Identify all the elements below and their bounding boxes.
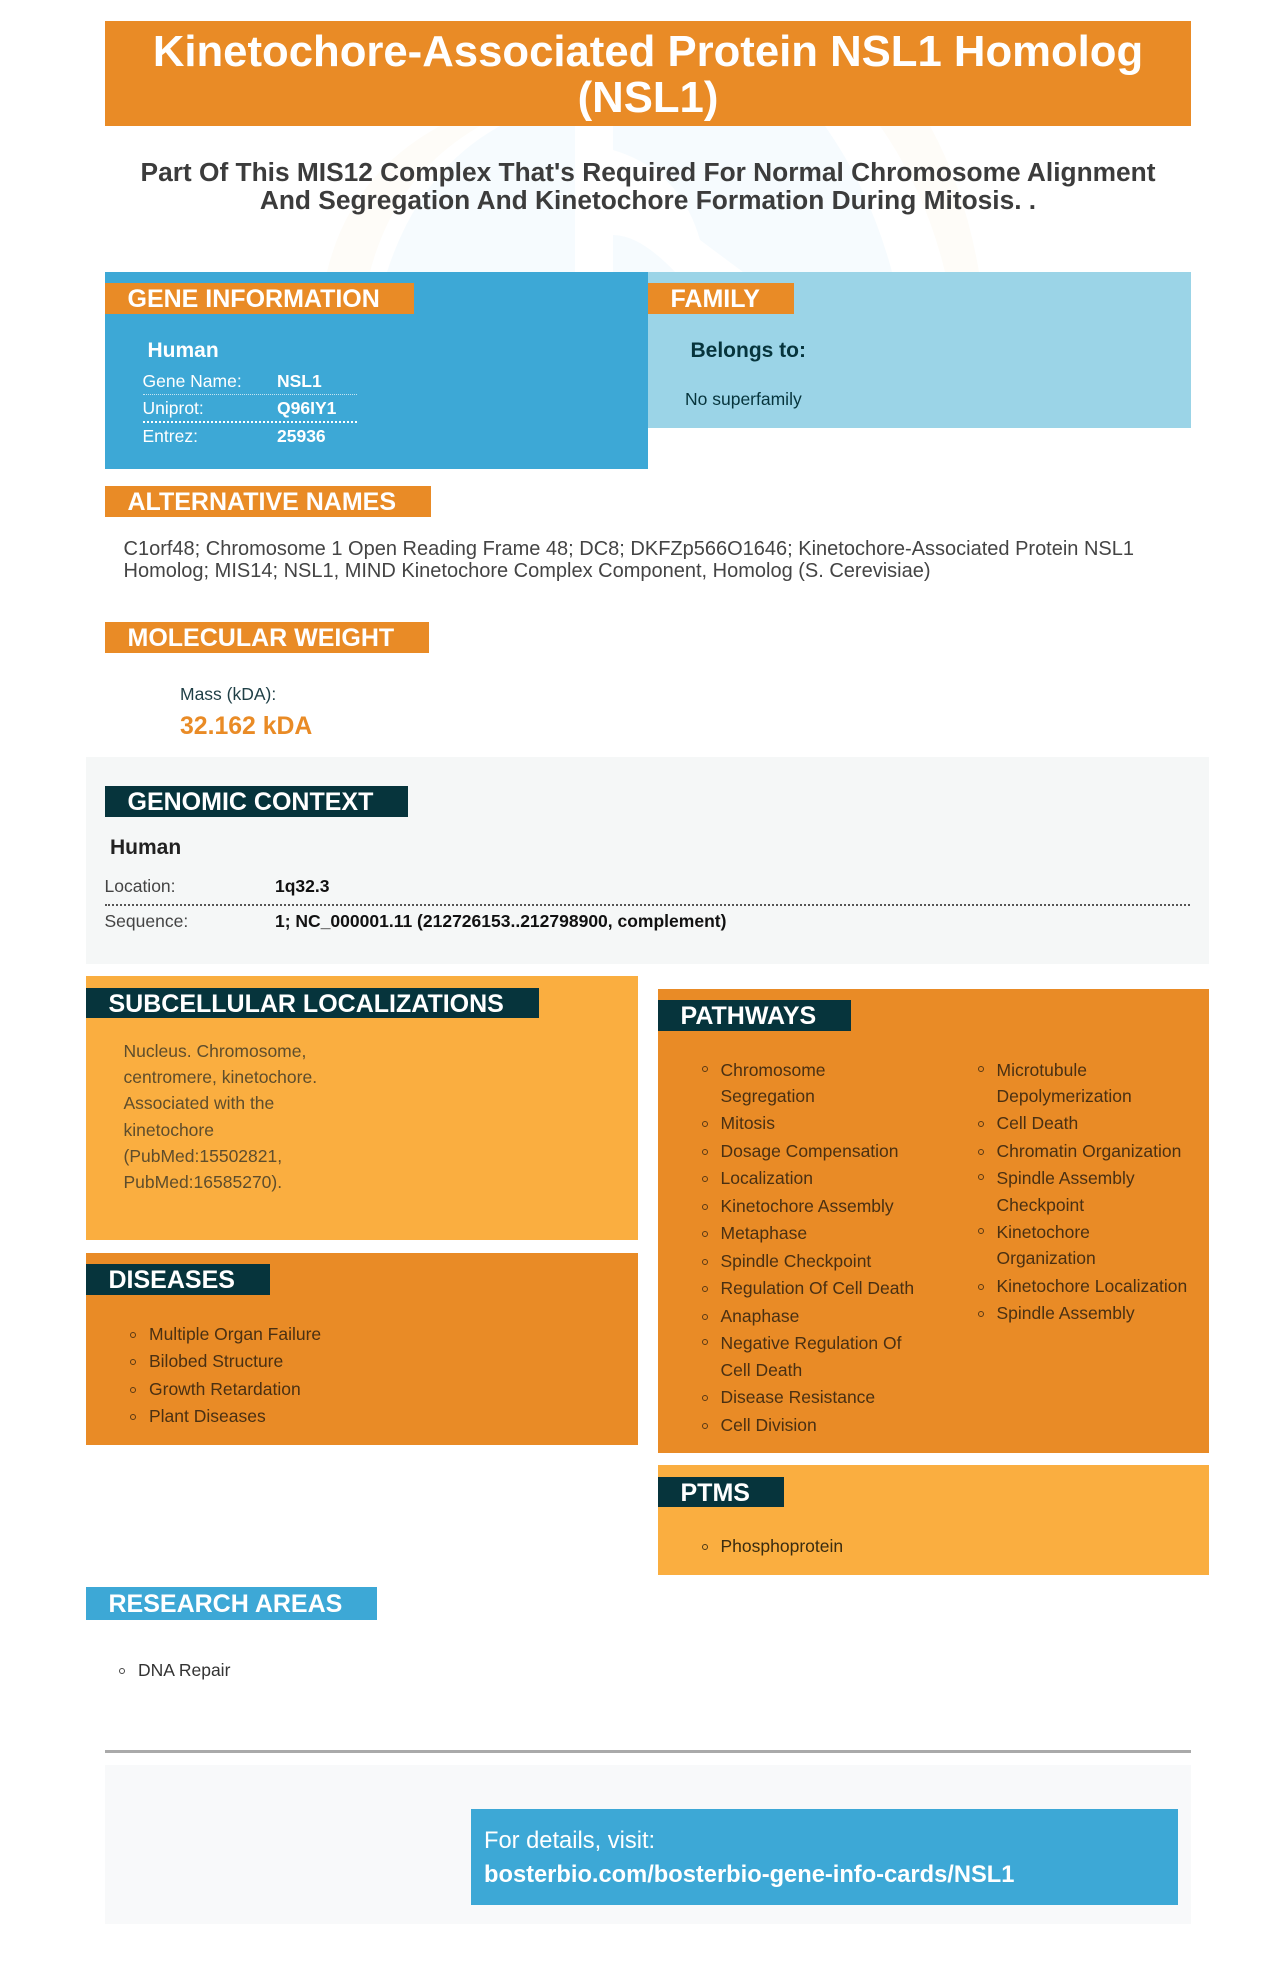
superfamily value: No superfamily [685,389,802,409]
pathway item: Localization [720,1168,813,1188]
pathway item: Spindle Checkpoint [720,1251,871,1271]
pathway item: Organization [996,1248,1096,1268]
value: entrez: 25936 [277,426,326,446]
pathway item: Segregation [720,1086,815,1106]
pathway item: Microtubule [996,1060,1087,1080]
species: human: Human [110,836,181,858]
heading: alternative names: ALTERNATIVE NAMES [128,488,396,516]
heading: ptms [658,1477,784,1507]
localization text: centromere, kinetochore. [124,1067,317,1087]
pathway item: Chromatin Organization [996,1141,1181,1161]
pathway item: Chromosome [720,1060,826,1080]
label: uniprot: Uniprot: [142,398,204,418]
subtitle: And Segregation And Kinetochore Formation During Mitosis. . [260,185,1036,215]
ptm item: Phosphoprotein [720,1536,843,1556]
pathway item: Negative Regulation Of [720,1332,901,1352]
belongs to label: Belongs to: [690,338,806,362]
subtitle: Part Of This MIS12 Complex That's Required For Normal Chromosome Alignment [141,157,1155,187]
value: sequence: 1; NC_000001.11 (212726153..212798900, complement) [275,911,726,931]
heading: gene information: GENE INFORMATION [128,285,380,313]
panel: gene information [105,272,648,469]
heading: genomic context: GENOMIC CONTEXT [128,788,373,816]
disease item: Bilobed Structure [149,1351,283,1371]
disease item: Growth Retardation [149,1379,301,1399]
value: location: 1q32.3 [275,876,329,896]
pathway item: Checkpoint [996,1195,1084,1215]
pathway item: Dosage Compensation [720,1141,899,1161]
pathway item: Metaphase [720,1223,807,1243]
pathway item [996,1219,1096,1271]
pathway item [996,1165,1135,1219]
visit url: bosterbio.com/bosterbio-gene-info-cards/NSL1 [484,1862,1014,1888]
visit label: For details, visit: [484,1828,655,1854]
callout: details link [471,1809,1178,1905]
localization text: Associated with the [124,1093,274,1113]
alternative names text [124,538,1134,582]
pathway item: Cell Death [996,1112,1078,1132]
heading: molecular weight: MOLECULAR WEIGHT [128,624,394,652]
localization text: Nucleus. Chromosome, [124,1041,306,1061]
panel: footer [105,1765,1191,1924]
pathway item: Disease Resistance [720,1387,875,1407]
heading: diseases [86,1264,270,1295]
pathway item: Cell Death [720,1360,802,1380]
title [105,21,1191,126]
label: sequence: Sequence: [104,911,188,931]
panel: ptms [658,1465,1209,1575]
pathway item: Anaphase [720,1306,799,1326]
pathway item: Spindle Assembly [996,1303,1135,1323]
localization text [124,1041,317,1192]
pathway item: Depolymerization [996,1086,1132,1106]
label: entrez: Entrez: [142,426,198,446]
research area item: DNA Repair [138,1660,230,1680]
pathway item [720,1330,901,1384]
localization text: kinetochore [124,1120,214,1140]
heading: family: FAMILY [670,285,760,313]
panel: subcellular localizations [86,976,638,1240]
pathway item: Kinetochore Localization [996,1276,1187,1296]
pathway item [720,1057,826,1109]
disease item: Multiple Organ Failure [149,1324,321,1344]
value: gene name: NSL1 [277,371,322,391]
title: (NSL1) [578,73,718,122]
heading: pathways [658,1000,851,1031]
value: uniprot: Q96IY1 [277,398,336,418]
heading: diseases: DISEASES [108,1266,235,1294]
localization text: (PubMed:15502821, [124,1146,282,1166]
pathway item: Mitosis [720,1112,775,1132]
label: gene name: Gene Name: [142,371,242,391]
pathway item: Cell Division [720,1415,817,1435]
panel: diseases [86,1253,638,1445]
subtitle [141,157,1156,215]
heading: ptms: PTMS [680,1479,750,1507]
mass value: 32.162 kDA [180,713,312,740]
pathway item: Regulation Of Cell Death [720,1278,914,1298]
alternative names text: Homolog; MIS14; NSL1, MIND Kinetochore Complex Component, Homolog (S. Cerevisiae) [124,560,931,582]
panel: genomic context [86,757,1209,964]
heading: research areas [86,1587,377,1620]
alternative names text: C1orf48; Chromosome 1 Open Reading Frame 48; DC8; DKFZp566O1646; Kinetochore-Associated Protein NSL1 [124,538,1134,560]
heading: pathways: PATHWAYS [680,1002,816,1030]
title: Kinetochore-Associated Protein NSL1 Homolog [153,27,1143,76]
heading: subcellular localizations: SUBCELLULAR LOCALIZATIONS [108,990,504,1018]
watermark logo [388,126,892,272]
label: location: Location: [104,876,176,896]
disease item: Plant Diseases [149,1406,266,1426]
panel: family [648,272,1191,428]
pathway item: Kinetochore [996,1222,1090,1242]
pathway item [996,1057,1132,1109]
heading: research areas: RESEARCH AREAS [108,1590,342,1618]
pathway item: Spindle Assembly [996,1168,1135,1188]
localization text: PubMed:16585270). [124,1172,282,1192]
panel: pathways [658,989,1209,1453]
species: human: Human [148,338,219,362]
pathway item: Kinetochore Assembly [720,1196,894,1216]
mass label: Mass (kDA): [180,684,276,704]
heading: family [648,283,794,314]
